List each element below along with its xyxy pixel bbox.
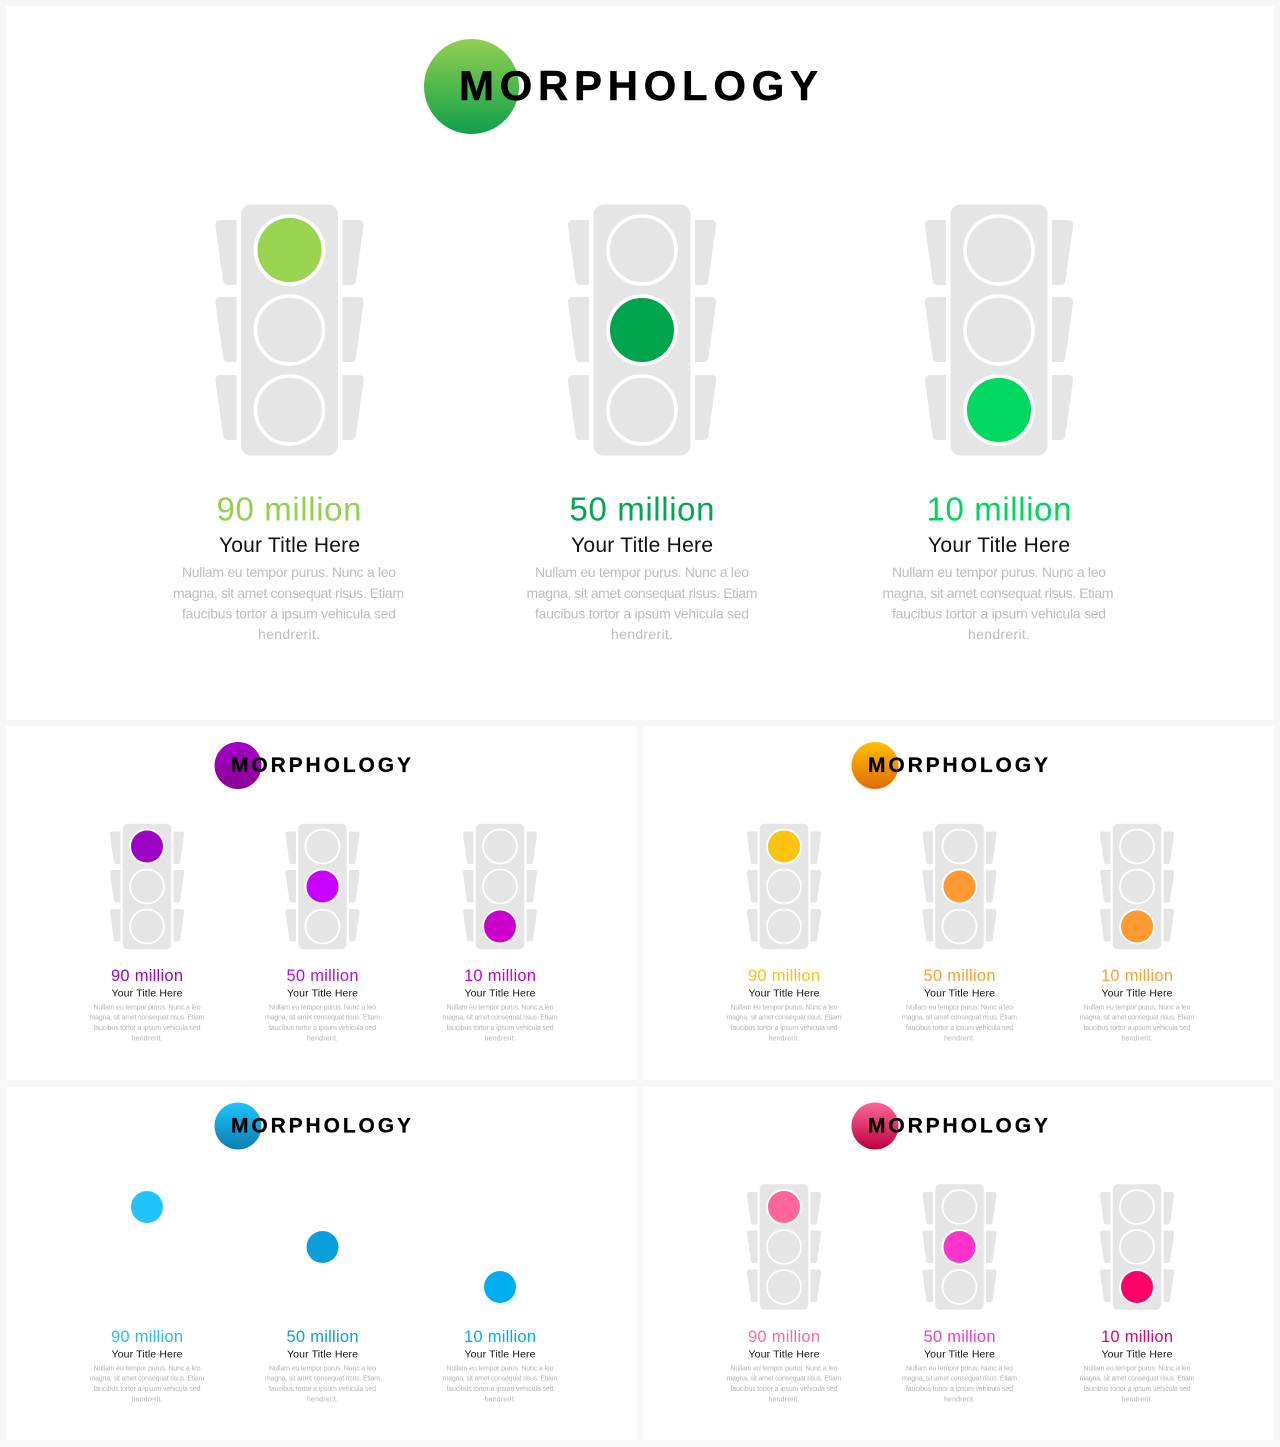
icon: traffic light bottom lamp lit [925, 204, 1073, 456]
description: hendrerit. [132, 1396, 163, 1404]
description [726, 1366, 842, 1404]
heading: Your Title Here [924, 1348, 995, 1360]
title badge: pink circle [852, 1102, 898, 1150]
heading: Your Title Here [1102, 988, 1173, 1000]
value: 10 million [464, 967, 536, 985]
description: Nullam eu tempor purus. Nunc a leo [446, 1366, 554, 1372]
description: magna, sit amet consequat risus. Etiam [882, 585, 1114, 601]
title badge: blue circle [214, 1102, 262, 1150]
description: faucibus tortor a ipsum vehicula sed [269, 1025, 376, 1032]
value: 90 million [216, 490, 362, 528]
description: faucibus tortor a ipsum vehicula sed [269, 1386, 376, 1393]
description: magna, sit amet consequat risus. Etiam [265, 1014, 380, 1022]
title: MORPHOLOGY [231, 1114, 411, 1138]
column: 10 million [1080, 1184, 1195, 1404]
description: magna, sit amet consequat risus. Etiam [726, 1014, 842, 1022]
description: Nullam eu tempor purus. Nunc a leo [1084, 1366, 1191, 1372]
description: hendrerit. [258, 626, 320, 642]
value: 90 million [111, 967, 183, 985]
description [726, 1004, 842, 1042]
value: 10 million [464, 1328, 536, 1346]
description [265, 1366, 380, 1404]
description [526, 564, 758, 642]
value: 50 million [286, 1328, 358, 1346]
description: hendrerit. [611, 626, 673, 642]
description: hendrerit. [944, 1036, 975, 1042]
heading: Your Title Here [287, 1348, 358, 1360]
title badge: orange circle [852, 742, 898, 789]
description: hendrerit. [944, 1396, 975, 1404]
description: faucibus tortor a ipsum vehicula sed [730, 1386, 838, 1393]
title badge: green circle [424, 39, 519, 134]
icon: traffic light [110, 824, 184, 949]
description: Nullam eu tempor purus. Nunc a leo [94, 1366, 201, 1372]
panel: purple slide [6, 726, 637, 1080]
column: 90 million [726, 1184, 842, 1404]
description: hendrerit. [307, 1396, 338, 1404]
column: 90 million [90, 824, 205, 1042]
heading: Your Title Here [924, 988, 995, 1000]
description: faucibus tortor a ipsum vehicula sed [446, 1025, 554, 1032]
value: 90 million [748, 967, 820, 985]
title: MORPHOLOGY [868, 754, 1048, 777]
heading: Your Title Here [464, 1348, 536, 1360]
description [1080, 1366, 1195, 1404]
icon: traffic light [747, 824, 821, 949]
column: 90 million [726, 824, 842, 1042]
value: 50 million [286, 967, 358, 985]
description: faucibus tortor a ipsum vehicula sed [906, 1025, 1013, 1032]
description: hendrerit. [307, 1036, 338, 1042]
title badge: purple circle [214, 742, 262, 789]
description: hendrerit. [1122, 1036, 1153, 1042]
icon: traffic light top lamp lit [215, 204, 364, 456]
description [902, 1004, 1017, 1042]
description: Nullam eu tempor purus. Nunc a leo [182, 564, 396, 580]
description: faucibus tortor a ipsum vehicula sed [182, 606, 396, 622]
description: hendrerit. [968, 626, 1030, 642]
description [90, 1366, 205, 1404]
description: magna, sit amet consequat risus. Etiam [442, 1376, 558, 1382]
description: Nullam eu tempor purus. Nunc a leo [906, 1004, 1013, 1012]
description: Nullam eu tempor purus. Nunc a leo [1084, 1004, 1191, 1012]
description: Nullam eu tempor purus. Nunc a leo [906, 1366, 1013, 1372]
column: 10 million [442, 1271, 558, 1404]
description: Nullam eu tempor purus. Nunc a leo [446, 1004, 554, 1012]
description: hendrerit. [1122, 1396, 1153, 1404]
description: magna, sit amet consequat risus. Etiam [1080, 1014, 1195, 1022]
heading: Your Title Here [219, 534, 360, 557]
description: faucibus tortor a ipsum vehicula sed [94, 1386, 201, 1393]
column: 50 million [526, 204, 758, 642]
value: 10 million [926, 490, 1072, 528]
value: 90 million [748, 1328, 820, 1346]
description: Nullam eu tempor purus. Nunc a leo [730, 1004, 838, 1012]
description: faucibus tortor a ipsum vehicula sed [892, 606, 1106, 622]
description: magna, sit amet consequat risus. Etiam [902, 1014, 1017, 1022]
column: 10 million [882, 204, 1114, 642]
description: faucibus tortor a ipsum vehicula sed [1084, 1386, 1191, 1393]
description [90, 1004, 205, 1042]
description: hendrerit. [768, 1036, 800, 1042]
description: faucibus tortor a ipsum vehicula sed [94, 1025, 201, 1032]
column: 90 million [90, 1191, 205, 1404]
heading: Your Title Here [748, 1348, 820, 1360]
description: faucibus tortor a ipsum vehicula sed [535, 606, 749, 622]
icon: blue dot [306, 1231, 338, 1263]
title: MORPHOLOGY [459, 62, 818, 109]
description: Nullam eu tempor purus. Nunc a leo [94, 1004, 201, 1012]
description: magna, sit amet consequat risus. Etiam [442, 1014, 558, 1022]
icon: traffic light [922, 824, 997, 949]
description: Nullam eu tempor purus. Nunc a leo [730, 1366, 838, 1372]
heading: Your Title Here [112, 1348, 183, 1360]
heading: Your Title Here [112, 988, 183, 1000]
heading: Your Title Here [464, 988, 536, 1000]
description: magna, sit amet consequat risus. Etiam [173, 585, 404, 601]
icon: traffic light [285, 824, 360, 949]
panel: pink slide [643, 1087, 1274, 1440]
description: Nullam eu tempor purus. Nunc a leo [269, 1366, 376, 1372]
value: 50 million [924, 967, 996, 985]
description: Nullam eu tempor purus. Nunc a leo [269, 1004, 376, 1012]
column: 50 million [902, 824, 1017, 1042]
description: hendrerit. [484, 1396, 516, 1404]
value: 50 million [570, 490, 714, 528]
column: 10 million [1080, 824, 1195, 1042]
column: 50 million [265, 1231, 380, 1404]
description: magna, sit amet consequat risus. Etiam [265, 1376, 380, 1382]
description: hendrerit. [132, 1036, 163, 1042]
column: 10 million [442, 824, 558, 1042]
icon: traffic light [1100, 1184, 1174, 1310]
icon: blue dot [484, 1271, 516, 1303]
description: magna, sit amet consequat risus. Etiam [902, 1376, 1017, 1382]
panel: orange slide [643, 726, 1274, 1080]
icon: traffic light [1100, 824, 1174, 949]
panel: blue slide [6, 1087, 637, 1440]
description: hendrerit. [768, 1396, 800, 1404]
heading: Your Title Here [571, 534, 713, 557]
heading: Your Title Here [748, 988, 820, 1000]
description [442, 1366, 558, 1404]
value: 10 million [1101, 967, 1173, 985]
title: MORPHOLOGY [231, 754, 411, 777]
heading: Your Title Here [928, 534, 1070, 557]
description: faucibus tortor a ipsum vehicula sed [906, 1386, 1013, 1393]
description: faucibus tortor a ipsum vehicula sed [730, 1025, 838, 1032]
icon: blue dot [131, 1191, 163, 1223]
description: magna, sit amet consequat risus. Etiam [90, 1014, 205, 1022]
description: magna, sit amet consequat risus. Etiam [90, 1376, 205, 1382]
description [265, 1004, 380, 1042]
value: 50 million [924, 1328, 996, 1346]
description [882, 564, 1114, 642]
heading: Your Title Here [1102, 1348, 1173, 1360]
description: hendrerit. [484, 1036, 516, 1042]
description: magna, sit amet consequat risus. Etiam [1080, 1376, 1195, 1382]
column: 50 million [902, 1184, 1017, 1404]
column: 90 million [173, 204, 404, 642]
value: 90 million [111, 1328, 183, 1346]
column: 50 million [265, 824, 380, 1042]
icon: traffic light [747, 1184, 821, 1310]
heading: Your Title Here [287, 988, 358, 1000]
description [1080, 1004, 1195, 1042]
description: faucibus tortor a ipsum vehicula sed [446, 1386, 554, 1393]
icon: traffic light [463, 824, 537, 949]
panel: main green slide [6, 6, 1274, 720]
description [173, 564, 404, 642]
description: faucibus tortor a ipsum vehicula sed [1084, 1025, 1191, 1032]
description [902, 1366, 1017, 1404]
description [442, 1004, 558, 1042]
value: 10 million [1101, 1328, 1173, 1346]
description: Nullam eu tempor purus. Nunc a leo [535, 564, 749, 580]
description: magna, sit amet consequat risus. Etiam [726, 1376, 842, 1382]
description: Nullam eu tempor purus. Nunc a leo [892, 564, 1106, 580]
title: MORPHOLOGY [868, 1114, 1048, 1138]
description: magna, sit amet consequat risus. Etiam [526, 585, 758, 601]
icon: traffic light [922, 1184, 997, 1310]
icon: traffic light middle lamp lit [568, 204, 716, 456]
